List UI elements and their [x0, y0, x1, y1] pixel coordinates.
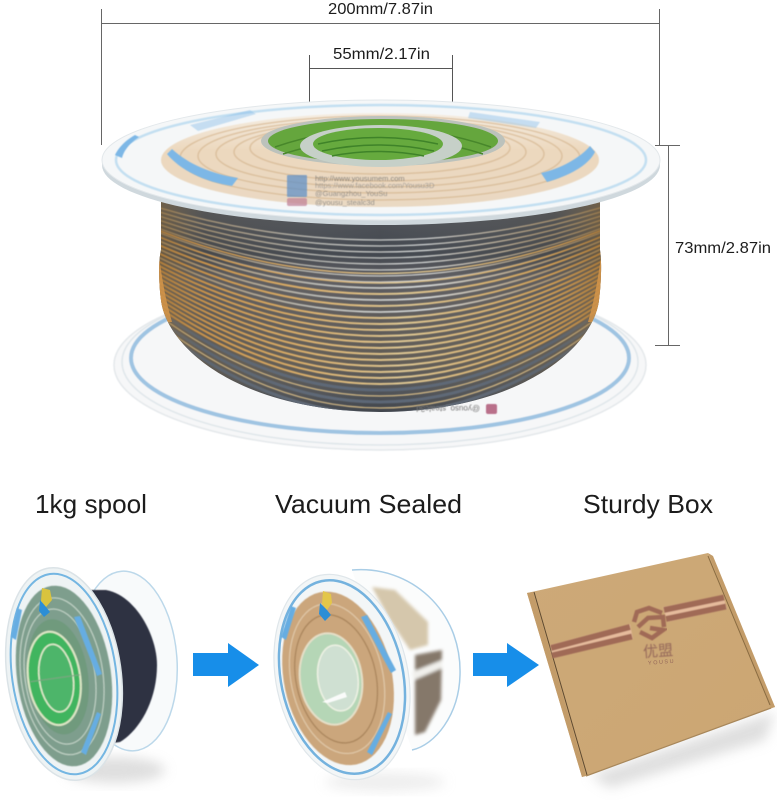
printed label text: @yousu_stealc3d — [315, 198, 375, 207]
brand latin text: YOUSU — [648, 659, 675, 667]
hexagon logo — [634, 608, 664, 638]
spool shadow — [65, 757, 165, 783]
printed label text — [287, 174, 435, 207]
photo: sturdy box — [527, 553, 775, 788]
back flange with bag — [352, 570, 460, 750]
brand text: 优盟 — [643, 642, 674, 661]
filament disc — [5, 579, 123, 773]
heading: Vacuum Sealed: Vacuum Sealed — [275, 489, 462, 519]
green hub — [294, 629, 368, 729]
filament disc seen through flange — [161, 113, 599, 207]
top flange — [102, 100, 660, 225]
dimension: 73mm height: 73mm/2.87in — [675, 240, 771, 257]
social handle on bottom flange: @youso_stealc3d — [416, 404, 480, 413]
blue labels — [281, 606, 396, 755]
blue labels on disc — [115, 110, 595, 186]
dimension: 200mm width: 200mm/7.87in — [328, 1, 433, 18]
arrow: vacuum sealed to box — [473, 643, 539, 687]
box top — [527, 553, 775, 777]
photo: 1kg spool — [0, 560, 183, 788]
filament body — [150, 200, 610, 415]
dimension: 55mm hub: 55mm/2.17in — [333, 46, 430, 63]
printed label text: https://www.facebook.com/Yousu3D — [315, 181, 435, 190]
main spool photo — [102, 100, 660, 450]
tan filament disc — [267, 581, 409, 776]
printed label text: http://www.yousumem.com — [315, 174, 405, 183]
printed label text: @Guangzhou_YouSu — [315, 189, 387, 198]
glare — [322, 692, 347, 703]
logo on disc — [319, 591, 332, 621]
front flange — [0, 560, 135, 788]
heading: 1kg spool: 1kg spool — [35, 489, 147, 519]
dark filament side — [88, 590, 157, 745]
bag shadow — [325, 773, 445, 791]
arrow: spool to vacuum sealed — [193, 643, 259, 687]
box shadow — [590, 712, 775, 788]
bottom flange — [114, 279, 646, 450]
hub with green core — [261, 116, 505, 167]
box flap edges — [527, 553, 775, 777]
heading: Sturdy Box: Sturdy Box — [583, 489, 713, 519]
logo on disc — [39, 588, 52, 617]
photo: vacuum sealed spool — [256, 562, 460, 792]
red-brown stripes — [550, 595, 727, 658]
blue labels — [11, 608, 102, 755]
back flange — [73, 568, 183, 754]
front flange — [256, 562, 428, 792]
bag reflections — [372, 587, 442, 735]
